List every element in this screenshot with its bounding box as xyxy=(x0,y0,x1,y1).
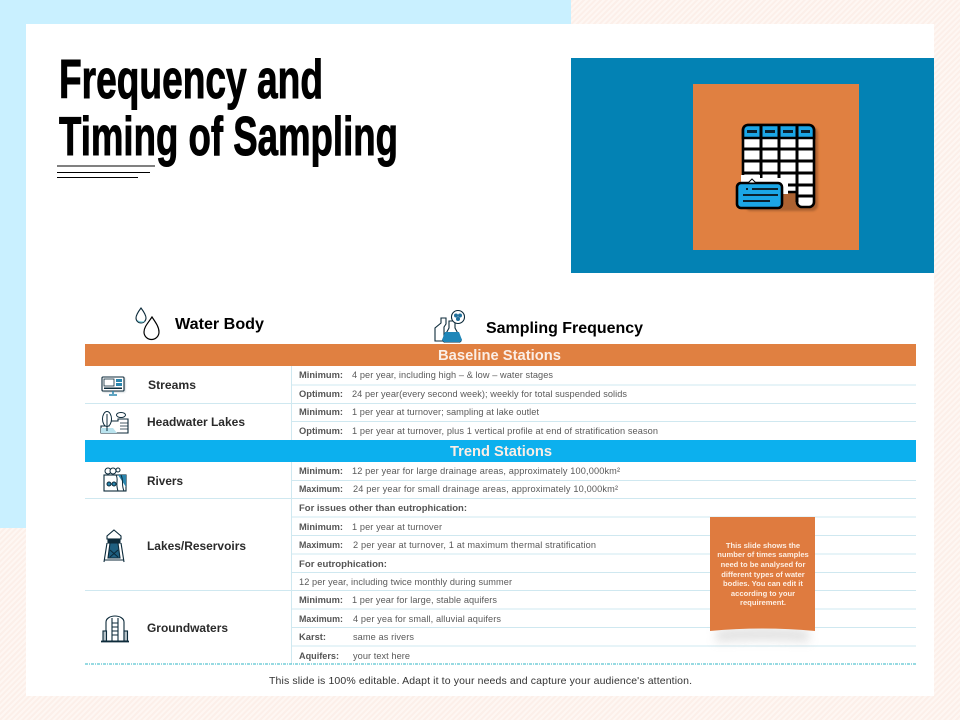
icon: monitor xyxy=(102,377,125,395)
row: lakes and reservoirs: For eutrophication: xyxy=(299,559,387,569)
callout note: different types of water xyxy=(721,570,805,579)
row: groundwaters: 4 per yea for small, alluvial aquifers xyxy=(353,614,501,624)
row: groundwaters: Maximum: xyxy=(299,614,343,624)
row: rivers: Minimum: xyxy=(299,466,343,476)
row: groundwaters: Karst: xyxy=(299,632,326,642)
row: lakes and reservoirs xyxy=(104,503,596,587)
icon: flask and molecule xyxy=(435,310,464,342)
row: streams: Minimum: xyxy=(299,370,343,380)
row: streams: 24 per year(every second week); weekly for total suspended solids xyxy=(352,389,627,399)
row: headwater lakes: Minimum: xyxy=(299,407,343,417)
callout note xyxy=(710,517,815,642)
row: headwater lakes: Optimum: xyxy=(299,426,343,436)
callout note: number of times samples xyxy=(717,550,809,559)
orange square xyxy=(693,84,859,250)
callout note: requirement. xyxy=(740,598,786,607)
row: rivers: 24 per year for small drainage areas, approximately 10,000km² xyxy=(353,484,618,494)
row: rivers xyxy=(104,466,620,494)
row: lakes and reservoirs: Minimum: xyxy=(299,522,343,532)
icon: river landscape xyxy=(104,468,126,491)
row: groundwaters: Groundwaters xyxy=(147,621,228,635)
band: baseline stations xyxy=(85,344,916,366)
row: rivers: Rivers xyxy=(147,474,183,488)
blue image panel xyxy=(571,58,934,273)
title: Frequency and xyxy=(59,48,323,110)
band: trend stations: Trend Stations xyxy=(450,444,552,460)
icon: water drops xyxy=(136,308,159,340)
callout note: according to your xyxy=(731,589,795,598)
header: water body xyxy=(136,308,264,340)
callout note: bodies. You can edit it xyxy=(723,579,803,588)
header: sampling frequency: Sampling Frequency xyxy=(486,320,643,337)
footer note: This slide is 100% editable. Adapt it to your needs and capture your audience's attention. xyxy=(269,675,692,687)
row: streams: Optimum: xyxy=(299,389,343,399)
row: groundwaters: Minimum: xyxy=(299,595,343,605)
row: groundwaters: Aquifers: xyxy=(299,651,339,661)
band: baseline stations: Baseline Stations xyxy=(438,348,561,364)
icon: water tower xyxy=(104,530,124,562)
row: groundwaters xyxy=(101,595,501,661)
row: lakes and reservoirs: 1 per year at turnover xyxy=(352,522,442,532)
row: groundwaters: your text here xyxy=(353,651,410,661)
title underline xyxy=(57,166,155,178)
row: lakes and reservoirs: 2 per year at turnover, 1 at maximum thermal stratification xyxy=(353,540,596,550)
row: lakes and reservoirs: Maximum: xyxy=(299,540,343,550)
band: trend stations xyxy=(85,440,916,462)
callout note: need to be analysed for xyxy=(721,560,805,569)
row: groundwaters: same as rivers xyxy=(353,632,414,642)
icon: spreadsheet with note xyxy=(737,125,818,211)
row: headwater lakes: Headwater Lakes xyxy=(147,415,245,429)
callout note: This slide shows the xyxy=(726,541,800,550)
row: streams xyxy=(102,370,627,399)
row: lakes and reservoirs: 12 per year, including twice monthly during summer xyxy=(299,577,512,587)
row: headwater lakes: 1 per year at turnover; sampling at lake outlet xyxy=(352,407,539,417)
row: streams: Streams xyxy=(148,378,196,392)
row: groundwaters: 1 per year for large, stable aquifers xyxy=(352,595,497,605)
icon: lake with tree xyxy=(101,412,128,433)
title xyxy=(59,48,398,167)
header: water body: Water Body xyxy=(175,316,264,333)
row: headwater lakes xyxy=(101,407,658,436)
row: rivers: Maximum: xyxy=(299,484,343,494)
title: Timing of Sampling xyxy=(59,105,398,167)
row: rivers: 12 per year for large drainage areas, approximately 100,000km² xyxy=(352,466,620,476)
row: lakes and reservoirs: For issues other than eutrophication: xyxy=(299,503,467,513)
row: headwater lakes: 1 per year at turnover, plus 1 vertical profile at end of stratification season xyxy=(352,426,658,436)
row: lakes and reservoirs: Lakes/Reservoirs xyxy=(147,539,246,553)
icon: storage tank xyxy=(101,616,129,642)
row: streams: 4 per year, including high – & low – water stages xyxy=(352,370,553,380)
header: sampling frequency xyxy=(435,310,643,342)
